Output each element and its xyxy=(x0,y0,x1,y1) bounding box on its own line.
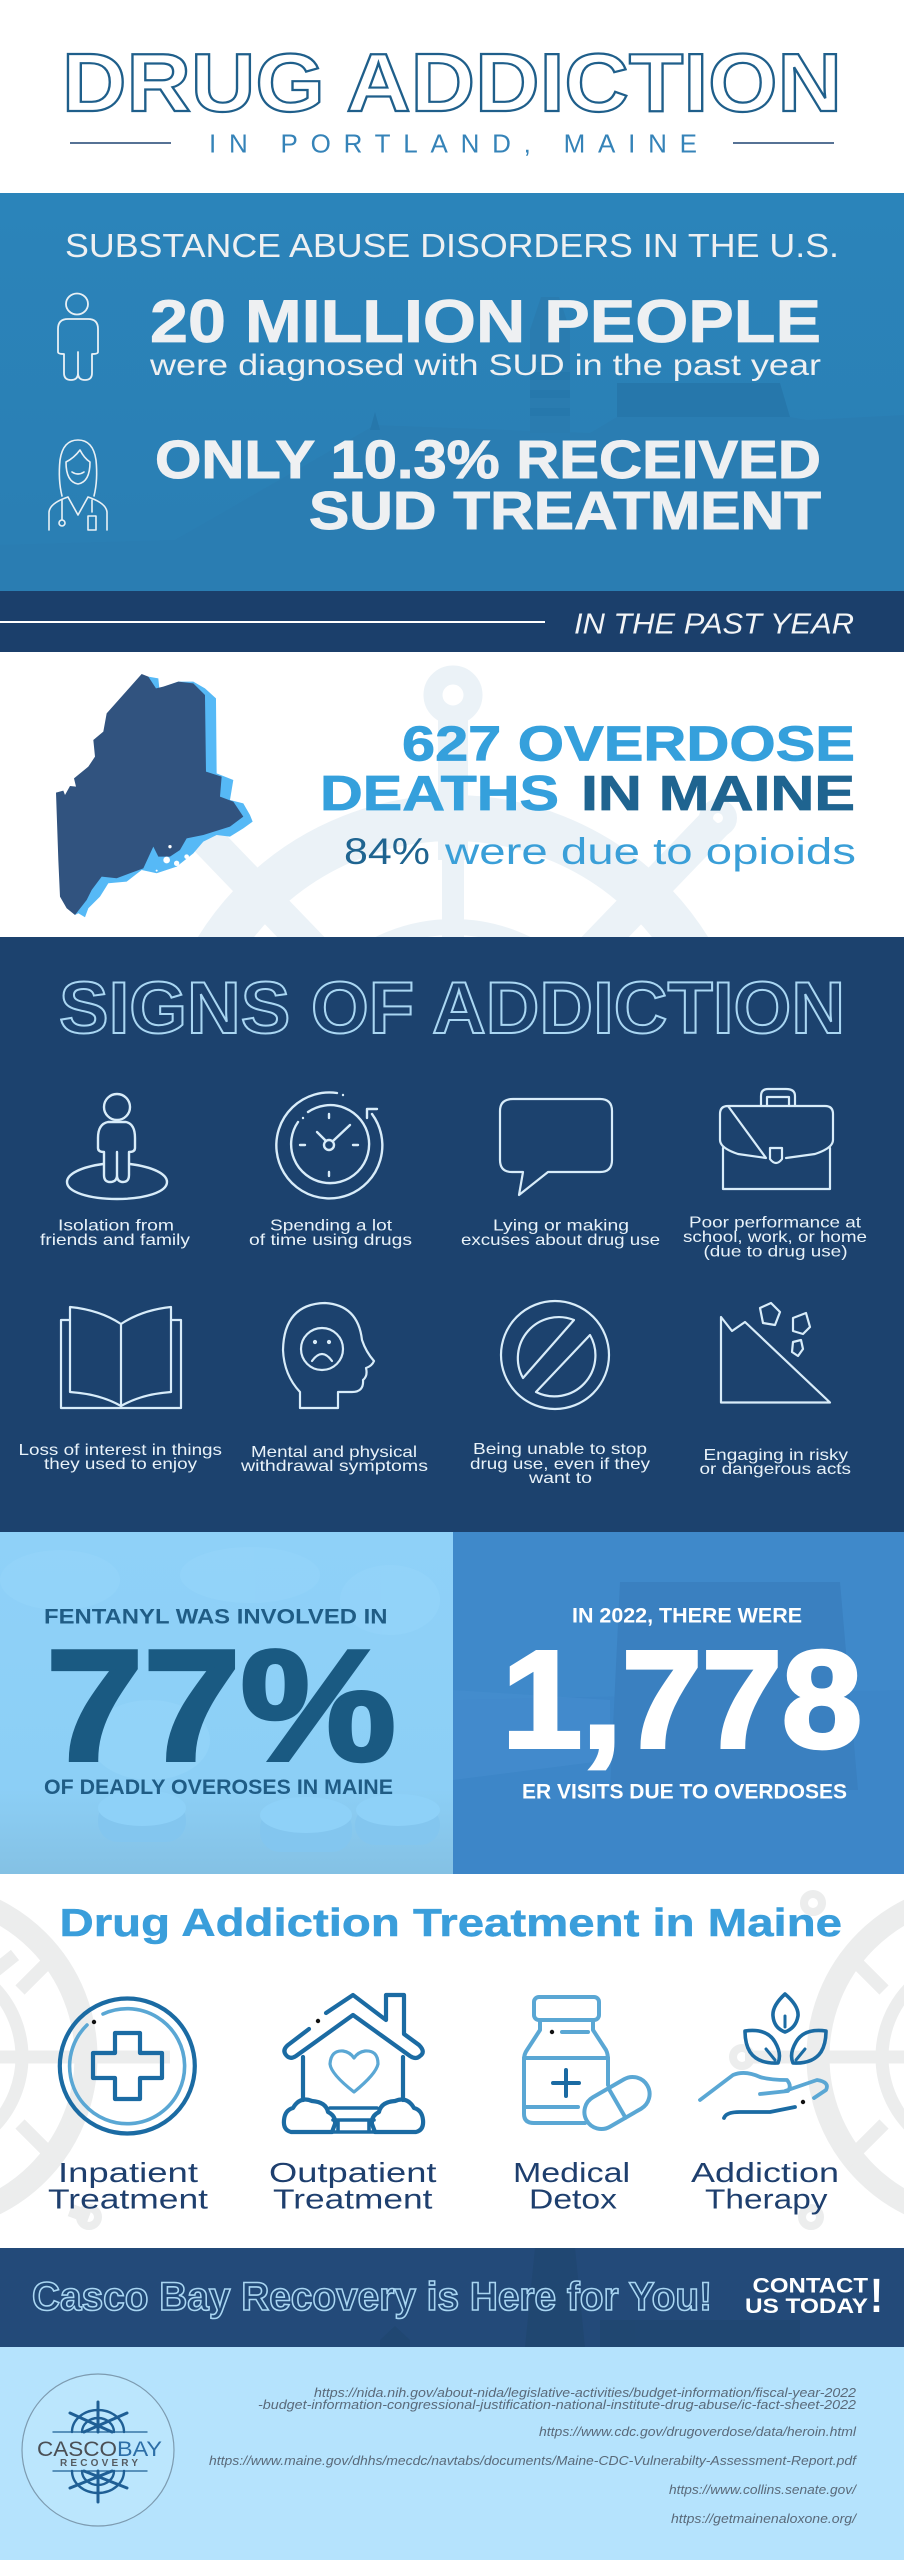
stat text xyxy=(522,1604,847,1804)
stat text: ER VISITS DUE TO OVERDOSES xyxy=(522,1780,847,1804)
stat: 84% due to opioids: 84% xyxy=(344,831,430,872)
label: Loss of interest in things xyxy=(18,1442,222,1459)
stat: 627 overdose deaths xyxy=(320,718,855,821)
label xyxy=(18,1442,222,1473)
label: they used to enjoy xyxy=(44,1456,197,1473)
icon: prohibition sign xyxy=(501,1301,609,1409)
label: Treatment xyxy=(48,2184,208,2214)
background: lighthouse photo xyxy=(0,297,904,591)
icon: speech bubble xyxy=(500,1099,612,1195)
stat: only 10.3% received treatment: ONLY 10.3% RECEIVED xyxy=(155,430,821,490)
panel: in the past year band xyxy=(0,591,904,652)
sources: https://getmainenaloxone.org/ xyxy=(671,2512,858,2526)
contact us today: ! xyxy=(870,2270,883,2323)
label: Outpatient xyxy=(269,2157,437,2188)
background: ship wheel watermarks xyxy=(0,1893,904,2226)
stat text xyxy=(44,1606,393,1799)
stat: 20 million people: 20 MILLION PEOPLE xyxy=(150,288,821,355)
sources: https://www.cdc.gov/drugoverdose/data/heroin.html xyxy=(539,2425,857,2439)
icon: briefcase xyxy=(720,1089,833,1189)
slogan: Casco Bay Recovery is Here for You! xyxy=(32,2275,712,2319)
background: anchor and ship wheel watermark xyxy=(195,666,737,937)
label xyxy=(249,1218,412,1249)
label xyxy=(48,2157,208,2214)
heading: SUBSTANCE ABUSE DISORDERS IN THE U.S. xyxy=(65,227,839,264)
label xyxy=(700,1447,851,1478)
stat: 627 overdose deaths: DEATHS xyxy=(320,767,559,821)
contact us today xyxy=(745,2270,883,2323)
band label: IN THE PAST YEAR xyxy=(574,608,854,640)
label: school, work, or home xyxy=(683,1229,867,1246)
panel: call to action xyxy=(0,2248,904,2347)
contact us today: CONTACT xyxy=(752,2274,868,2298)
sources: -budget-information-congressional-justification-national-institute-drug-abuse/ic-fact-sheet-2022 xyxy=(258,2398,856,2412)
title: DRUG ADDICTION xyxy=(62,36,842,129)
stat: 84% due to opioids: were due to opioids xyxy=(444,831,856,872)
subtitle: IN PORTLAND, MAINE xyxy=(209,128,697,158)
icon: open book xyxy=(61,1307,181,1408)
label xyxy=(461,1218,660,1249)
icon: medical cross badge xyxy=(60,1998,195,2134)
logo: Casco Bay Recovery: RECOVERY xyxy=(60,2458,138,2469)
label: Therapy xyxy=(705,2184,828,2214)
label: (due to drug use) xyxy=(704,1244,848,1260)
label: Isolation from xyxy=(58,1218,174,1234)
label xyxy=(513,2157,630,2214)
stat: 20 million people xyxy=(149,288,821,382)
label: Detox xyxy=(529,2184,617,2214)
label: want to xyxy=(528,1470,592,1487)
stat: 84% due to opioids xyxy=(344,831,856,872)
label: Being unable to stop xyxy=(473,1441,647,1458)
icon: Maine map xyxy=(56,674,253,917)
label: Inpatient xyxy=(58,2157,198,2188)
label: of time using drugs xyxy=(249,1232,412,1249)
label: friends and family xyxy=(40,1232,190,1249)
sources xyxy=(209,2386,858,2526)
stat: 627 overdose deaths: IN MAINE xyxy=(581,767,855,821)
stat: only 10.3% received treatment: SUD TREATMENT xyxy=(309,481,821,541)
stat text: IN 2022, THERE WERE xyxy=(572,1604,802,1628)
panel: signs of addiction xyxy=(0,937,904,1532)
background: pills photo xyxy=(0,1547,440,1852)
panel: title header xyxy=(0,0,904,193)
label xyxy=(470,1441,650,1487)
panel: footer xyxy=(0,2347,904,2560)
label: Poor performance at xyxy=(689,1214,862,1232)
logo: Casco Bay Recovery: BAY xyxy=(117,2438,162,2461)
label: Engaging in risky xyxy=(704,1447,848,1464)
label xyxy=(691,2157,839,2214)
sources: https://www.collins.senate.gov/ xyxy=(669,2483,858,2497)
big number: 1,778 xyxy=(502,1623,862,1777)
heading: Drug Addiction Treatment in Maine xyxy=(60,1902,842,1945)
icon: house with heart xyxy=(284,1995,423,2132)
label: excuses about drug use xyxy=(461,1232,660,1249)
icon: falling rocks xyxy=(721,1303,830,1402)
logo: Casco Bay Recovery xyxy=(22,2374,174,2526)
label: or dangerous acts xyxy=(700,1461,851,1478)
stat: 627 overdose deaths: 627 OVERDOSE xyxy=(402,718,855,772)
stat: only 10.3% received treatment xyxy=(155,430,821,541)
sources: https://nida.nih.gov/about-nida/legislative-activities/budget-information/fiscal-year-2022 xyxy=(314,2386,856,2400)
icon: head with sad face xyxy=(283,1303,374,1408)
label xyxy=(40,1218,190,1249)
background: ambulance photo xyxy=(453,1532,904,1790)
panel: overdose deaths in Maine xyxy=(56,666,854,937)
label xyxy=(269,2157,437,2214)
label: Lying or making xyxy=(493,1218,629,1234)
label: withdrawal symptoms xyxy=(240,1458,428,1475)
icon: hand with leaves xyxy=(700,1994,827,2118)
stat: 20 million people: were diagnosed with SUD in the past year xyxy=(149,349,821,382)
panel: substance abuse disorders in the U.S. xyxy=(0,193,904,591)
label: Mental and physical xyxy=(251,1444,417,1461)
panel: 1,778 ER visits xyxy=(453,1532,904,1874)
label: Addiction xyxy=(691,2157,839,2188)
label: Spending a lot xyxy=(270,1218,393,1234)
icon: person xyxy=(58,294,98,380)
label: Medical xyxy=(513,2157,630,2188)
heading: SIGNS OF ADDICTION xyxy=(59,968,845,1049)
background: lighthouse photo xyxy=(380,2248,800,2347)
icon: doctor xyxy=(49,440,107,530)
contact us today: US TODAY xyxy=(745,2295,868,2318)
icon: isolated person xyxy=(67,1094,167,1199)
label xyxy=(240,1444,428,1475)
icon: clock xyxy=(276,1092,382,1198)
panel: fentanyl 77% xyxy=(0,1532,453,1874)
logo: Casco Bay Recovery: CASCO xyxy=(37,2438,117,2461)
stat text: OF DEADLY OVEROSES IN MAINE xyxy=(44,1776,393,1799)
panel: treatment in Maine xyxy=(0,1874,904,2248)
stat text: FENTANYL WAS INVOLVED IN xyxy=(44,1606,388,1628)
sources: https://www.maine.gov/dhhs/mecdc/navtabs/documents/Maine-CDC-Vulnerabilty-Assessment-Report.pdf xyxy=(209,2454,858,2468)
icon: medicine bottle and pill xyxy=(524,1997,656,2135)
label: Treatment xyxy=(273,2184,433,2214)
big number: 77% xyxy=(46,1618,396,1794)
label xyxy=(683,1214,867,1260)
label: drug use, even if they xyxy=(470,1456,650,1473)
